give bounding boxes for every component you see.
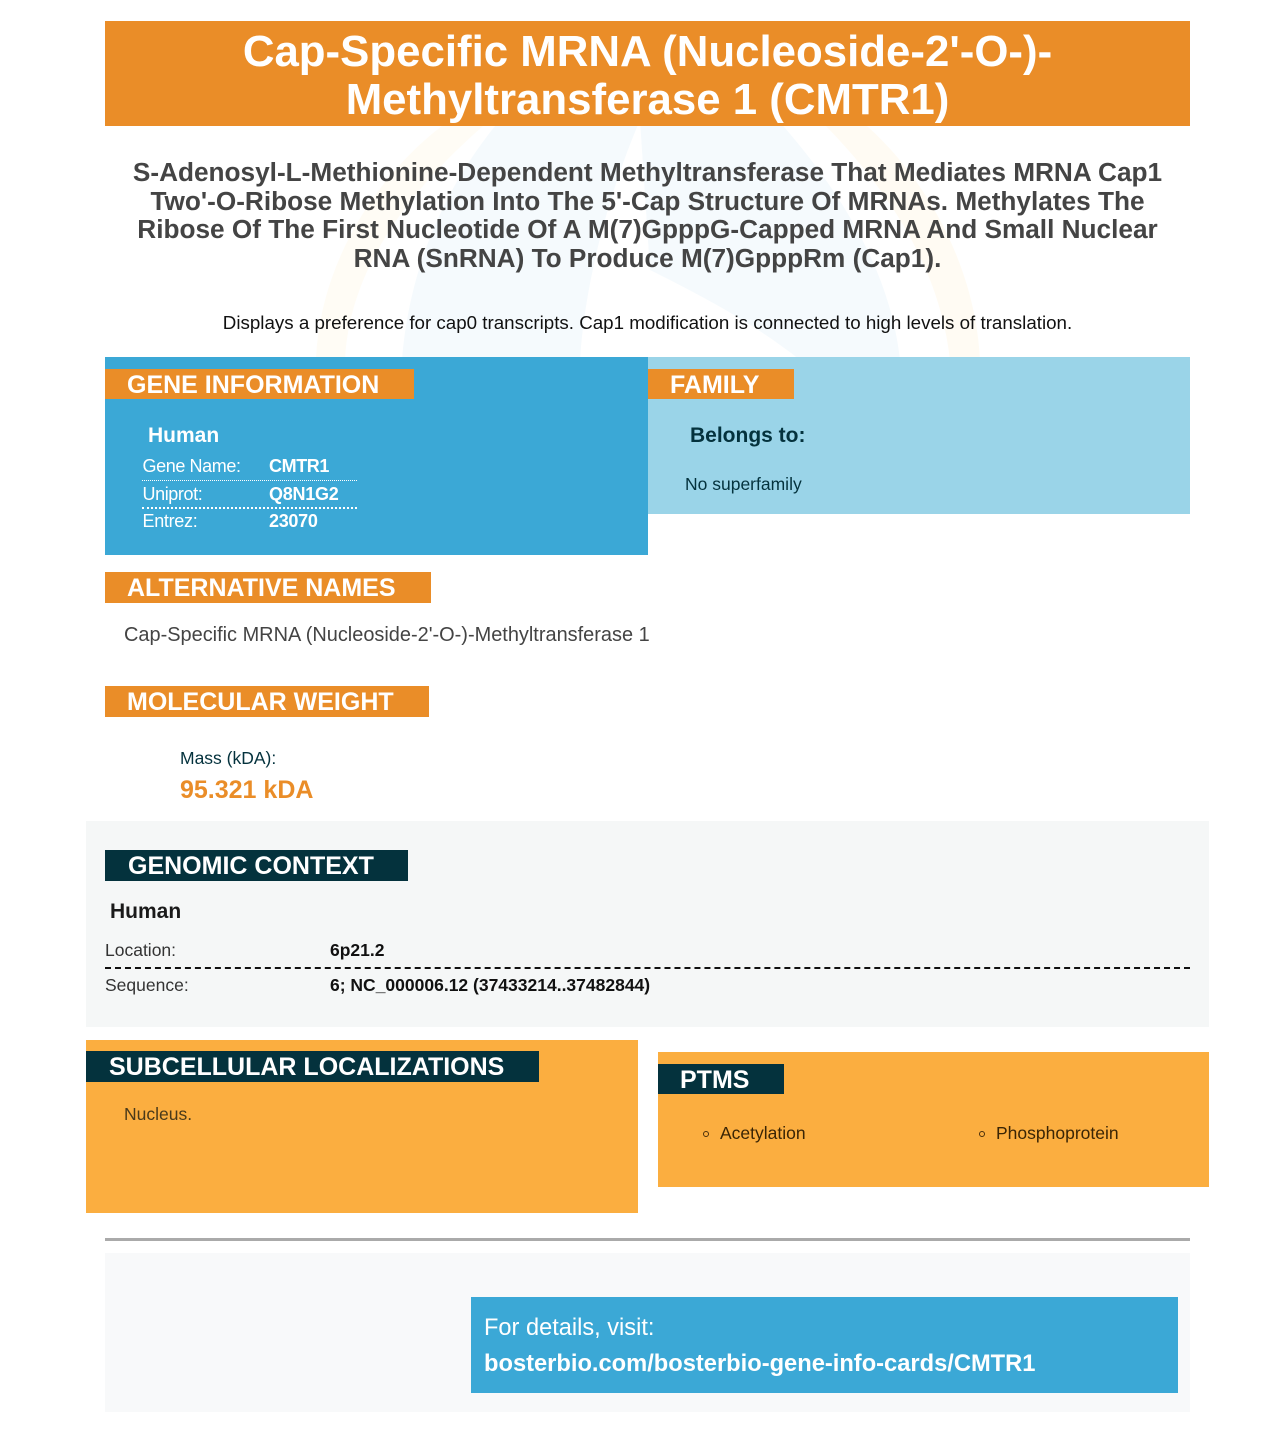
title banner <box>105 21 1190 126</box>
subtitle description: S-Adenosyl-L-Methionine-Dependent Methyltransferase That Mediates MRNA Cap1 <box>133 157 1162 187</box>
subtitle description <box>133 157 1162 273</box>
gene table: 23070 <box>269 511 318 531</box>
gene table: CMTR1 <box>269 456 329 476</box>
note text: Displays a preference for cap0 transcripts. Cap1 modification is connected to high levels of translation. <box>223 312 1072 333</box>
panel: subcellular localizations <box>86 1040 638 1213</box>
species label: Human <box>148 424 219 447</box>
heading: family: FAMILY <box>670 371 759 399</box>
panel: ptms <box>658 1052 1209 1187</box>
localization text: Nucleus. <box>124 1104 192 1124</box>
panel: footer <box>105 1253 1190 1412</box>
heading: subcellular localizations: SUBCELLULAR LOCALIZATIONS <box>109 1053 504 1081</box>
location row: 6p21.2 <box>330 940 384 960</box>
background watermark logo <box>316 126 980 357</box>
subtitle description: Two'-O-Ribose Methylation Into The 5'-Cap Structure Of MRNAs. Methylates The <box>150 186 1145 216</box>
location row: Location: <box>105 940 176 960</box>
heading: molecular weight: MOLECULAR WEIGHT <box>127 688 394 716</box>
title banner: Methyltransferase 1 (CMTR1) <box>346 75 949 124</box>
subtitle description: RNA (SnRNA) To Produce M(7)GpppRm (Cap1). <box>354 243 941 273</box>
belongs to label: Belongs to: <box>690 424 806 447</box>
ptm item: phosphoprotein: Phosphoprotein <box>996 1123 1119 1143</box>
heading: ptms: PTMS <box>680 1066 749 1094</box>
mass label: Mass (kDA): <box>180 748 276 768</box>
alternative names text: Cap-Specific MRNA (Nucleoside-2'-O-)-Methyltransferase 1 <box>124 624 650 646</box>
panel: gene information <box>105 357 648 555</box>
gene table: Gene Name: <box>142 456 241 476</box>
sequence row <box>105 975 650 995</box>
heading: gene information: GENE INFORMATION <box>127 371 379 399</box>
gene table: Entrez: <box>142 511 197 531</box>
gene table: Uniprot: <box>142 484 202 504</box>
gene table: Q8N1G2 <box>269 484 339 504</box>
title banner: Cap-Specific MRNA (Nucleoside-2'-O-)- <box>243 27 1052 76</box>
visit label: For details, visit: <box>484 1315 654 1341</box>
location row <box>105 940 1190 969</box>
ptm item: acetylation: Acetylation <box>720 1123 806 1143</box>
sequence row: Sequence: <box>105 975 189 995</box>
heading: ptms <box>658 1064 784 1094</box>
visit url: bosterbio.com/bosterbio-gene-info-cards/CMTR1 <box>484 1351 1035 1377</box>
panel: family <box>648 357 1190 514</box>
heading: family <box>648 369 794 399</box>
call to action box <box>471 1297 1178 1393</box>
heading: genomic context: GENOMIC CONTEXT <box>128 852 374 880</box>
divider <box>105 1238 1190 1241</box>
gene table <box>142 456 357 531</box>
heading: alternative names: ALTERNATIVE NAMES <box>127 574 396 602</box>
mass value: 95.321 kDA <box>180 776 313 804</box>
sequence row: 6; NC_000006.12 (37433214..37482844) <box>330 975 650 995</box>
superfamily text: No superfamily <box>685 474 802 494</box>
panel: genomic context <box>86 821 1209 1027</box>
subtitle description: Ribose Of The First Nucleotide Of A M(7)GpppG-Capped MRNA And Small Nuclear <box>137 214 1158 244</box>
species label: Human <box>110 900 181 923</box>
